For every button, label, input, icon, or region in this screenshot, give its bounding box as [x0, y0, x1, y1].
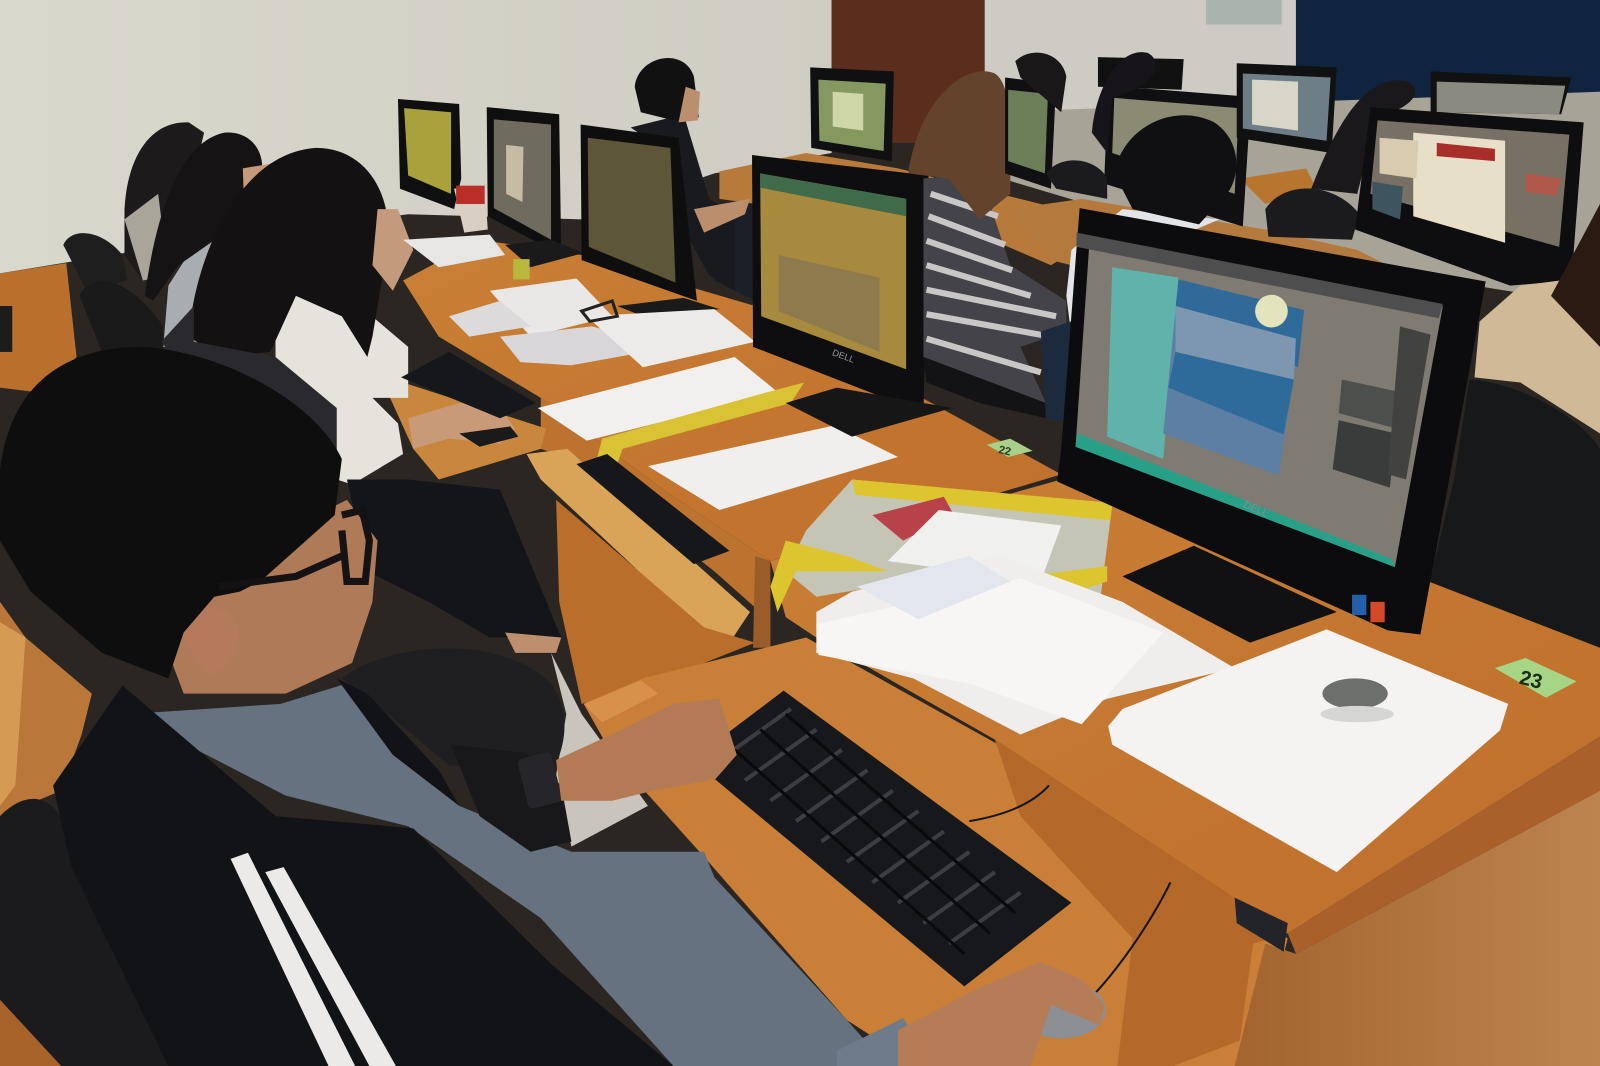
- middle desk row: [388, 240, 1061, 704]
- person: woman in white blouse: [161, 148, 561, 653]
- chairs at left: [63, 233, 163, 352]
- back row desks: [719, 153, 1316, 265]
- monitor: website on screen, centre: DELL: [831, 347, 856, 365]
- forearm cuff: [451, 745, 571, 852]
- person: dark-haired student, centre right: [1041, 115, 1236, 423]
- far right classroom backdrop: [985, 92, 1600, 306]
- monitors: back-left row: [398, 99, 719, 316]
- papers on front desk: [770, 479, 1508, 872]
- keyboard tray: [584, 638, 1288, 1066]
- floor patch: [551, 653, 648, 847]
- foreground student: [0, 347, 934, 1066]
- hand fingers over keyboard: [673, 699, 737, 780]
- desk number 22: 22: [997, 444, 1012, 458]
- jacket stripes: [231, 853, 355, 1066]
- person: woman in gray: [145, 133, 273, 352]
- hair: [0, 347, 342, 678]
- second hand and sleeve: [837, 1018, 934, 1066]
- items on the middle desk: [403, 184, 1033, 510]
- chair: right: [1429, 379, 1600, 653]
- front desk surface: [770, 479, 1600, 1066]
- person: woman in striped top: [908, 71, 1066, 418]
- shirt: [128, 683, 888, 1066]
- mouse and hand: [898, 962, 1106, 1066]
- person: far right woman in beige: [1474, 204, 1600, 434]
- monitors: back row: [810, 57, 1571, 226]
- person: man at back in dark shirt: [631, 58, 755, 301]
- far-left desk: [0, 263, 77, 393]
- monitor: website on screen, centre: [752, 155, 952, 437]
- monitor: right back, design software: [1355, 107, 1584, 286]
- neck and face: [168, 500, 378, 694]
- right desk rows in back: [1010, 199, 1408, 275]
- glasses: [219, 510, 369, 587]
- person: back-left woman: [124, 122, 204, 281]
- keyboards on middle row: [401, 352, 730, 564]
- cables: [969, 785, 1170, 995]
- chairs: back right: [1046, 160, 1359, 240]
- foreground chair and left wood desk: [0, 602, 564, 1066]
- people in back row: [1015, 52, 1415, 194]
- front keyboard: [692, 691, 1071, 986]
- front monitor: DELL: [1242, 500, 1270, 520]
- jacket: [53, 686, 673, 1066]
- front monitor: [1057, 208, 1486, 643]
- ear: [182, 606, 238, 674]
- desk number 23: 23: [1517, 667, 1544, 694]
- hand on keyboard: [556, 699, 737, 801]
